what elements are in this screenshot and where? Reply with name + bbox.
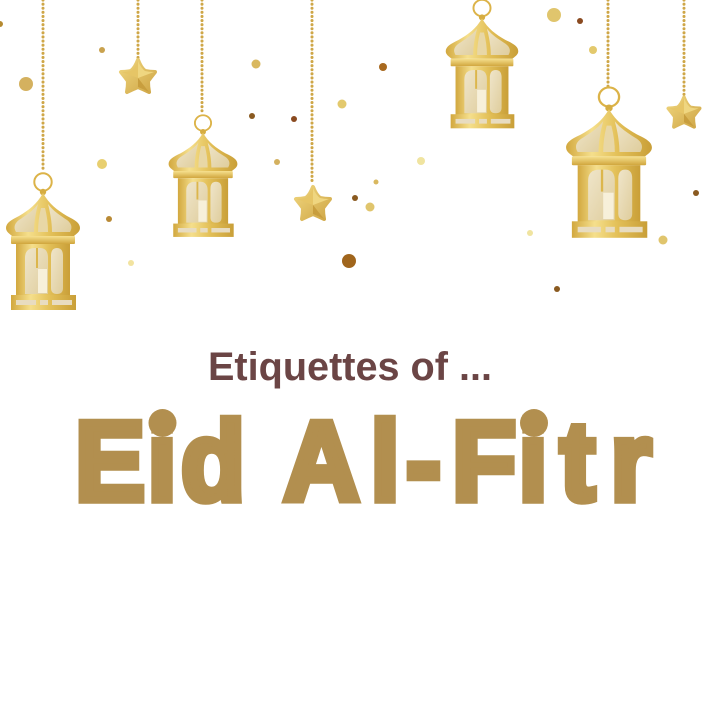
icon: lantern centre right [446, 0, 518, 128]
hanging chains [43, 0, 684, 183]
icon: star left [121, 60, 155, 92]
icon: star centre [296, 187, 330, 219]
icon: lantern far right [566, 87, 652, 238]
icon: lantern far left [6, 173, 80, 310]
icon: star right [668, 97, 700, 127]
subtitle: Etiquettes of ... [208, 345, 492, 389]
scattered confetti dots [0, 8, 699, 292]
title: Eid Al-Fitr [75, 400, 651, 525]
icon: lantern centre left [169, 115, 237, 237]
